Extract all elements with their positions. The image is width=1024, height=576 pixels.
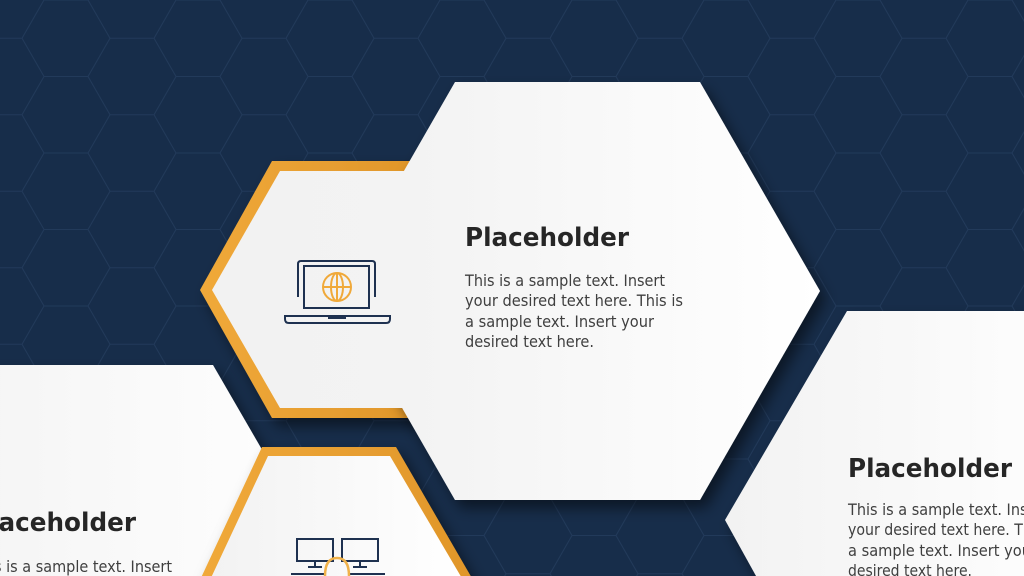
panel: right hexagon [725,311,1024,576]
text block: main [464,271,683,351]
text block: main: a sample text. Insert your [465,312,654,331]
panel: gold hexagon frame [200,161,420,418]
panel: bottom-left hexagon [0,365,268,576]
heading: right: Placeholder [848,454,1012,484]
panel: gold hexagon interior with laptop [212,171,404,408]
icon: laptop with globe [285,261,390,323]
text block: main: your desired text here. This is [465,291,683,310]
panel: bottom gold hexagon [200,447,473,576]
heading: main: Placeholder [465,223,629,253]
text block: main: This is a sample text. Insert [464,271,665,290]
icon: computers with person [291,539,385,576]
text block: right [847,500,1024,576]
panel: main white hexagon [335,82,820,500]
text block: main: desired text here. [465,332,594,351]
